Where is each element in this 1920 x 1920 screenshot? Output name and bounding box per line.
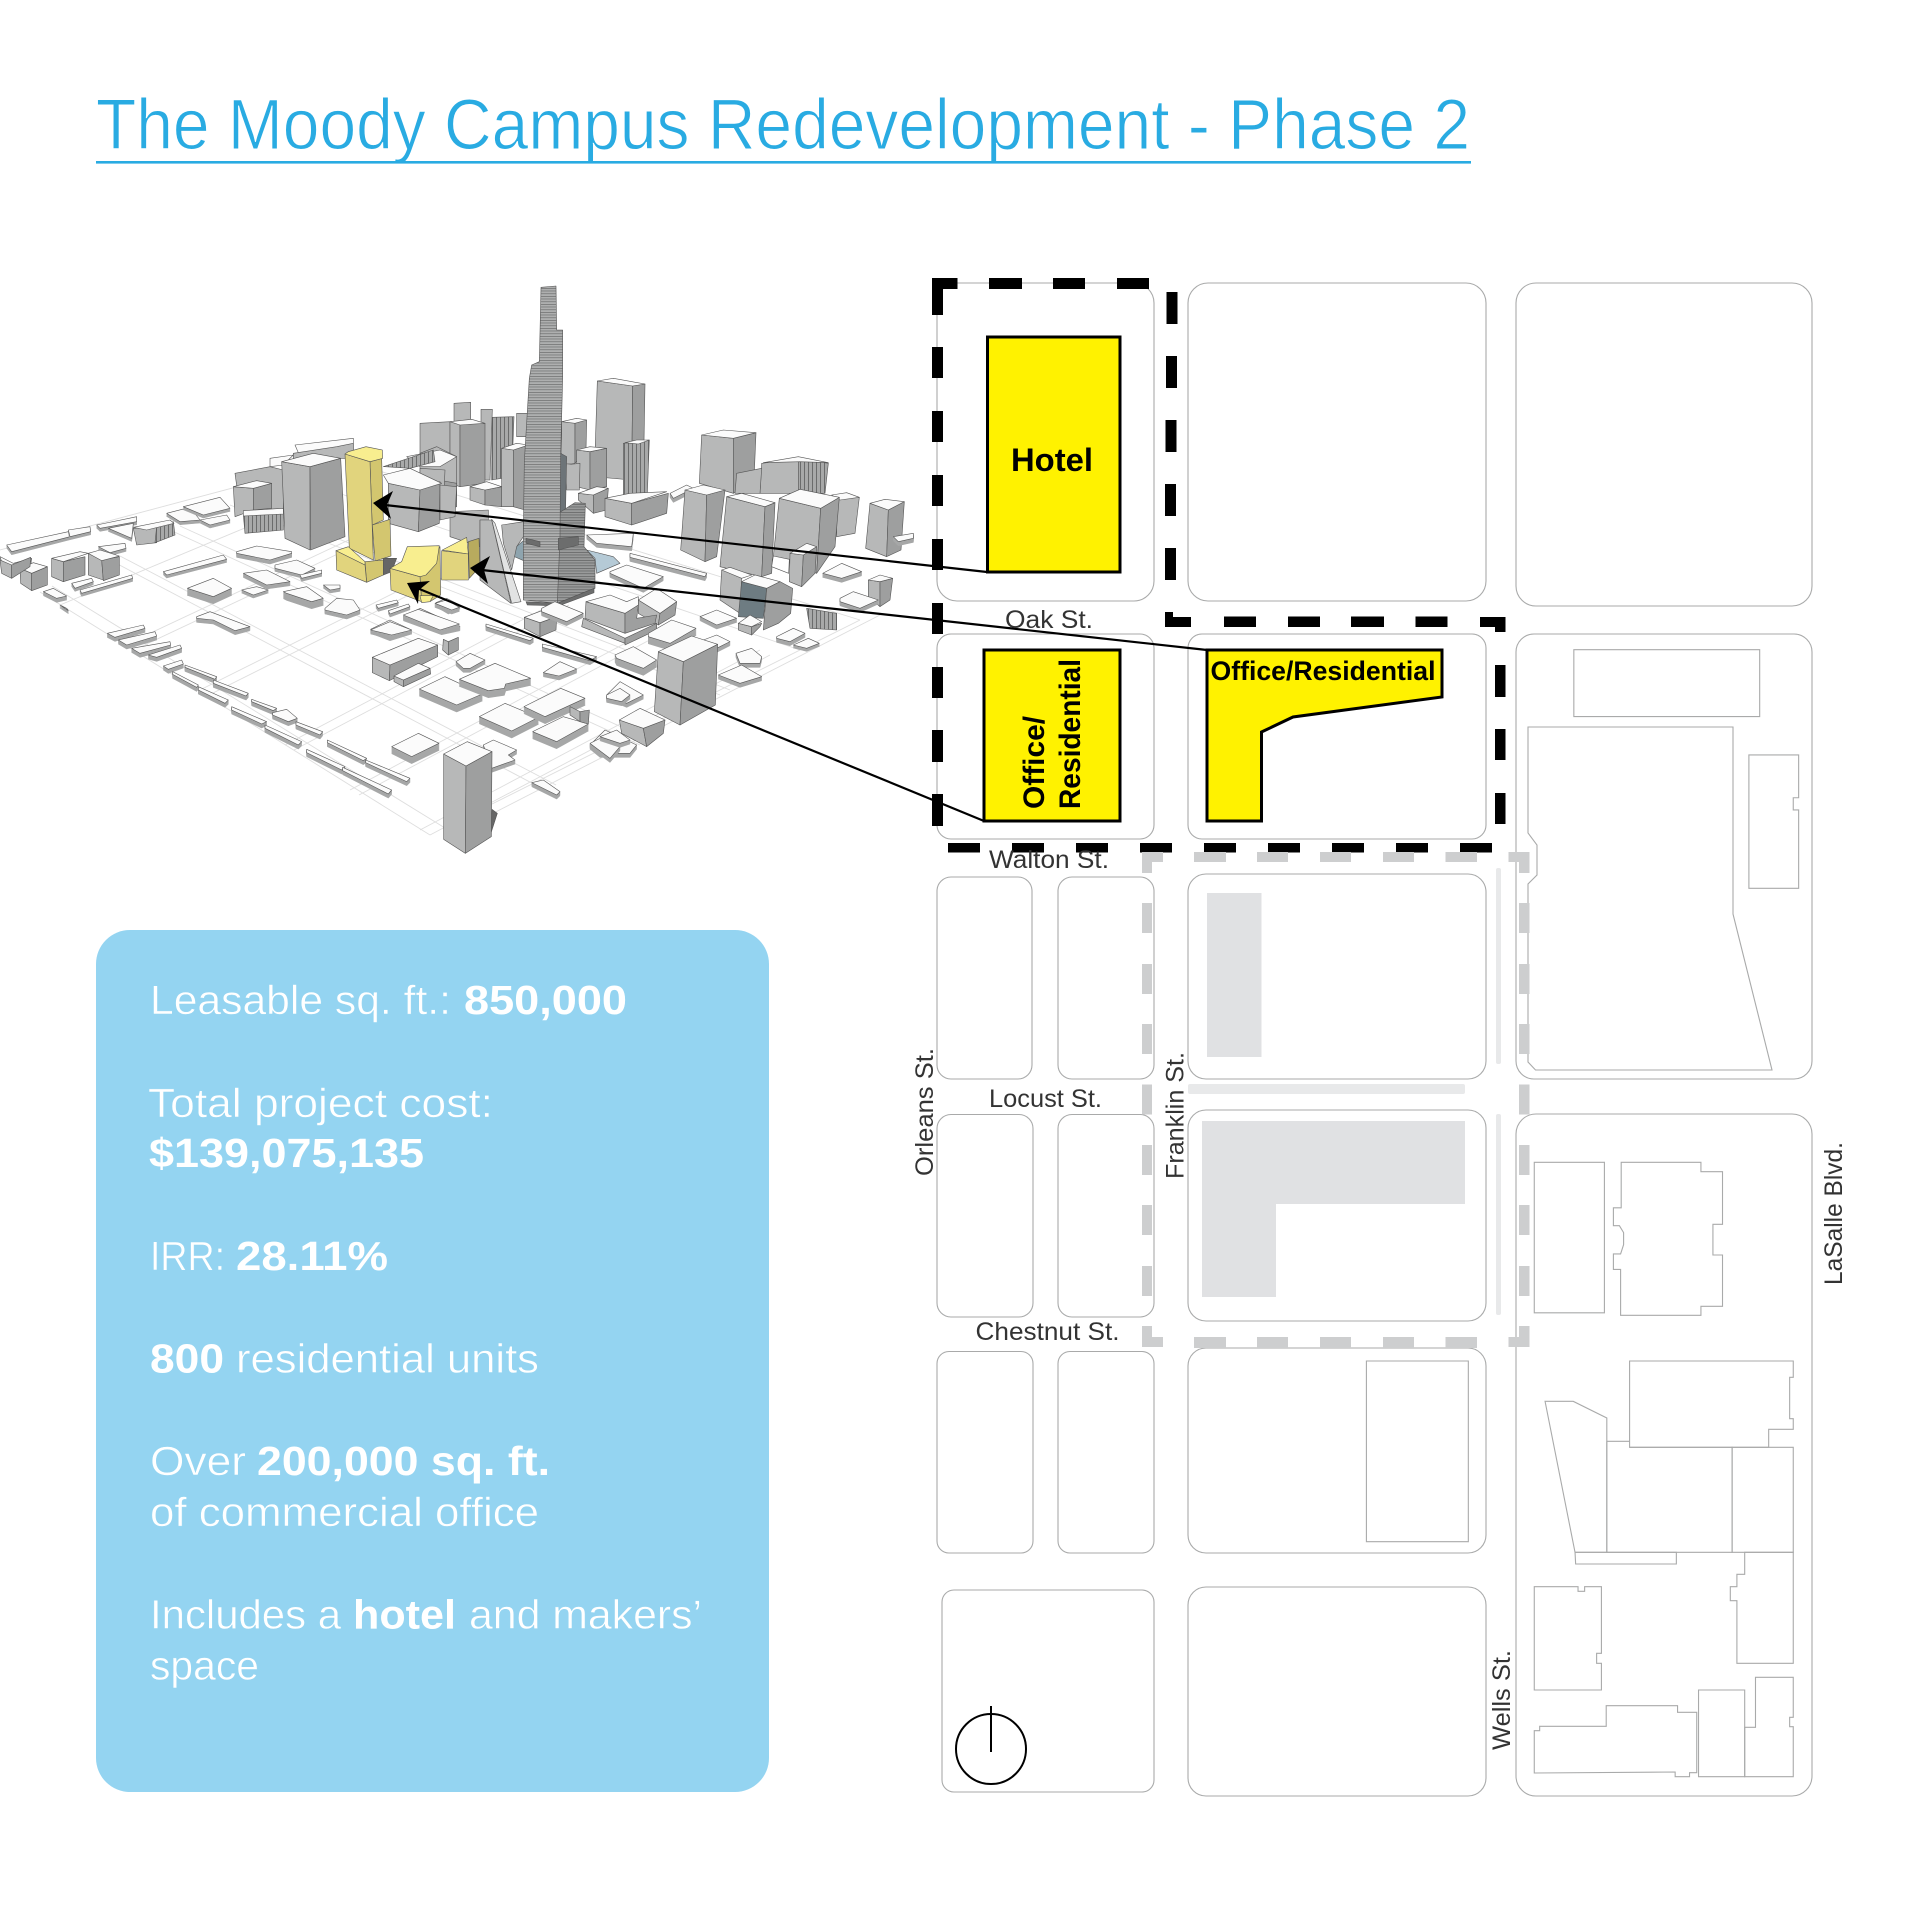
stat: hotel and makers space: Includes a	[150, 1592, 341, 1638]
yellow site: office/residential west	[984, 650, 1120, 821]
south tower	[444, 742, 492, 853]
street labels: Wells St.	[1488, 1650, 1516, 1750]
black dashed boundary: phase 2	[932, 278, 1506, 852]
title: The Moody Campus Redevelopment - Phase 2	[96, 86, 1470, 165]
street blocks	[937, 283, 1812, 1796]
stat: hotel and makers space: and makers’	[469, 1592, 702, 1638]
yellow site: office/residential east	[1207, 650, 1442, 821]
corner tower, east	[654, 636, 718, 725]
street labels: Franklin St.	[1162, 1052, 1190, 1179]
stat: residential units: residential units	[236, 1336, 539, 1382]
stat: commercial office: 200,000 sq. ft.	[257, 1438, 550, 1484]
stat: commercial office: Over	[150, 1438, 246, 1484]
street labels: Orleans St.	[911, 1048, 939, 1176]
stat: IRR	[150, 1233, 388, 1279]
street labels: Locust St.	[989, 1085, 1102, 1113]
stat: IRR: 28.11%	[236, 1233, 388, 1279]
glass plaza	[511, 538, 620, 573]
stat: hotel and makers space: space	[150, 1642, 259, 1688]
existing phase-1 footprints (grey)	[1188, 868, 1501, 1315]
arrow: hotel to tower	[373, 491, 987, 572]
arrow: west office to building	[407, 581, 984, 821]
highlighted Moody campus buildings (yellow)	[336, 447, 480, 603]
neighbouring building footprints	[1366, 650, 1799, 1777]
stat: hotel and makers space: hotel	[353, 1592, 456, 1638]
low buildings, south	[371, 600, 630, 853]
stat: commercial office: of commercial office	[150, 1489, 539, 1535]
low buildings, west side	[0, 497, 460, 794]
street labels: Walton St.	[989, 846, 1109, 874]
street labels: LaSalle Blvd.	[1820, 1142, 1848, 1285]
yellow site: office/residential east: Office/Residential	[1210, 656, 1436, 686]
yellow site: office/residential west: Residential	[1054, 659, 1087, 809]
street labels	[911, 606, 1848, 1750]
stat: total project cost: $139,075,135	[149, 1130, 424, 1176]
mid blocks	[524, 565, 730, 703]
yellow site: hotel	[988, 337, 1120, 572]
stat: leasable area: Leasable sq. ft.:	[150, 977, 451, 1023]
arrow: east office to building	[470, 556, 1207, 650]
yellow site: hotel: Hotel	[1011, 442, 1093, 478]
stat: leasable area: 850,000	[464, 977, 627, 1023]
yellow site: office/residential west: Office/	[1018, 715, 1051, 809]
slab beside the site	[450, 510, 523, 603]
downtown towers	[407, 286, 913, 753]
stat: IRR: IRR:	[150, 1233, 225, 1279]
icon: north compass	[956, 1706, 1026, 1784]
towers west of the site	[233, 438, 353, 550]
panel: project statistics	[96, 930, 769, 1792]
shadow of the south tower	[490, 809, 497, 836]
stat: total project cost	[148, 1080, 493, 1176]
stat: leasable area	[150, 977, 627, 1023]
street labels: Oak St.	[1005, 606, 1093, 634]
stat: residential units: 800	[150, 1336, 224, 1382]
stat: total project cost: Total project cost:	[148, 1080, 493, 1126]
grey dashed boundary: phase 1	[1142, 852, 1530, 1348]
east towers	[681, 430, 913, 683]
stat: hotel and makers space	[150, 1592, 702, 1688]
stat: commercial office	[150, 1438, 550, 1535]
city massing model	[0, 286, 913, 853]
supertall tower	[523, 286, 595, 606]
street labels: Chestnut St.	[976, 1318, 1120, 1346]
tall slab, north-east	[594, 378, 645, 480]
